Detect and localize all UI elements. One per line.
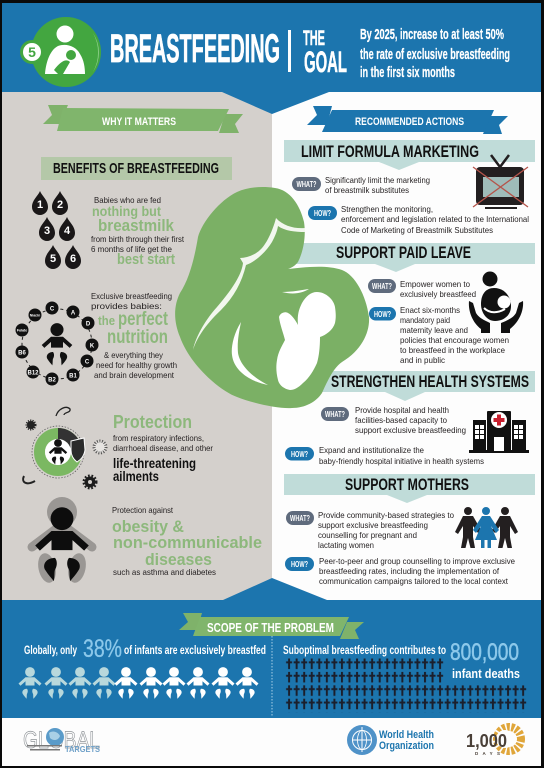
- logo: 1000 days: 1,000: [466, 731, 507, 751]
- logo: global targets 2025: TARGETS: [65, 744, 100, 754]
- benefit 4: text: obesity &: [112, 517, 184, 536]
- benefit 2: vitamins ring icon: Niacin: [30, 314, 40, 318]
- benefit 1: drops icon: 1: [37, 199, 43, 211]
- benefit 1: text: 6 months of life get the: [91, 244, 172, 254]
- benefit 1: drops icon: 4: [64, 225, 71, 237]
- text: strengthen health systems: facilities-based capacity to: [355, 415, 447, 425]
- benefit 2: vitamins ring icon: C: [85, 360, 90, 366]
- text: support mothers: support exclusive breastfeeding: [318, 520, 428, 530]
- benefit 4: text: diseases: [145, 550, 212, 569]
- pill: what, paid leave: WHAT?: [372, 282, 392, 291]
- pill: how, paid leave: [369, 307, 396, 320]
- benefit 2: vitamins ring icon: [16, 302, 98, 386]
- ribbon: scope of the problem: SCOPE OF THE PROBLEM: [207, 620, 334, 635]
- goal statement: in the first six months: [360, 65, 455, 81]
- benefit 3: protection shield icon: [23, 407, 106, 488]
- pictogram: infants row: [18, 667, 258, 699]
- panel: recommended actions background: [272, 90, 541, 602]
- ribbon: why it matters: [43, 105, 243, 133]
- text: support mothers: counselling for pregnant and: [318, 530, 417, 540]
- header banner: BREASTFEEDING: [110, 27, 280, 71]
- benefit 1: drops icon: [32, 191, 81, 269]
- statistic: 800,000 deaths: infant deaths: [452, 667, 520, 681]
- heading: benefits of breastfeeding: BENEFITS OF BREASTFEEDING: [53, 160, 219, 177]
- statistic: 38 percent: of infants are exclusively breastfed: [124, 645, 266, 657]
- benefit 1: drops icon: 3: [44, 225, 50, 237]
- benefit 4: baby with halo icon: [32, 497, 92, 584]
- pill: how, formula: HOW?: [314, 209, 331, 218]
- pill: how, paid leave: HOW?: [374, 310, 391, 319]
- benefit 2: vitamins ring icon: Folate: [17, 328, 27, 332]
- text: limit formula marketing: Significantly limit the marketing: [325, 175, 430, 185]
- benefit 2: vitamins ring icon: B6: [18, 350, 26, 356]
- benefit 2: text: need for healthy growth: [96, 360, 177, 370]
- benefit 1: drops icon: 2: [57, 199, 63, 211]
- subtitle: the goal: [303, 27, 347, 79]
- text: limit formula marketing: of breastmilk substitutes: [325, 185, 410, 195]
- pill: how, mothers: HOW?: [291, 560, 308, 569]
- benefit 1: drops icon: 5: [50, 253, 56, 265]
- pill: what, mothers: WHAT?: [290, 514, 310, 523]
- benefit 3: text: ailments: [113, 468, 159, 484]
- central illustration: mother and baby: [175, 187, 369, 408]
- header banner: [2, 3, 541, 114]
- benefit 2: vitamins ring icon: A: [71, 310, 76, 316]
- text: support paid leave: Empower women to: [400, 279, 470, 289]
- panel: footer background: [2, 716, 541, 766]
- text: support mothers: communication campaigns tailored to the local context: [319, 576, 509, 586]
- ribbon: scope of the problem: [179, 613, 364, 639]
- ribbon: recommended actions: [307, 106, 508, 134]
- benefit 2: text: perfect: [118, 309, 169, 330]
- text: support paid leave: [400, 279, 509, 365]
- panel: why it matters background: [2, 90, 272, 602]
- benefit 1: text: breastmilk: [98, 216, 174, 235]
- text: support paid leave: maternity leave and: [400, 325, 468, 335]
- pill: how, mothers: [285, 557, 314, 571]
- benefit 1: drops icon: 6: [70, 253, 76, 265]
- statistic: 38 percent: [24, 635, 266, 663]
- benefit 3: text: from respiratory infections,: [113, 433, 204, 443]
- benefit 4: text: such as asthma and diabetes: [113, 567, 217, 577]
- header banner: GOAL: [304, 46, 347, 79]
- pill: how, health systems: [285, 447, 314, 460]
- benefit 2: text: nutrition: [107, 327, 168, 348]
- benefit 2: text: Exclusive breastfeeding: [91, 291, 172, 301]
- text: support paid leave: exclusively breastfeed: [400, 289, 476, 299]
- statistic: 800,000 deaths: 800,000: [450, 639, 519, 666]
- heading text: support mothers: SUPPORT MOTHERS: [345, 476, 469, 494]
- statistic: 38 percent: Globally, only: [24, 645, 77, 657]
- logo: world health organization: World Health: [379, 729, 434, 741]
- benefit 2: text: the: [98, 313, 115, 328]
- band: strengthen health systems: [310, 371, 535, 401]
- text: support mothers: breastfeeding rates, including the implementation of: [319, 566, 500, 576]
- text: strengthen health systems: Provide hospital and health: [355, 405, 449, 415]
- icon: crossed-out television: [473, 155, 528, 209]
- text: support paid leave: mandatory paid: [400, 315, 450, 325]
- band: support paid leave: [284, 243, 535, 272]
- icon: breastfeeding target badge: [20, 17, 101, 87]
- band: support mothers: [284, 474, 535, 503]
- benefit 2: vitamins ring icon: B12: [27, 370, 39, 376]
- ribbon: recommended actions: RECOMMENDED ACTIONS: [355, 116, 464, 128]
- benefit 1: text: nothing but: [92, 203, 161, 219]
- text: support mothers: [318, 510, 515, 586]
- heading text: support paid leave: SUPPORT PAID LEAVE: [336, 244, 471, 262]
- divider bar: [288, 30, 291, 72]
- goal statement: [360, 27, 510, 81]
- benefit 3: text: Protection: [113, 411, 192, 432]
- pictogram: crosses: [285, 658, 527, 712]
- logo: world health organization: Organization: [379, 740, 434, 752]
- pill: what, formula: [292, 177, 321, 191]
- text: support mothers: lactating women: [318, 540, 374, 550]
- benefit 4: text: Protection against: [112, 505, 174, 515]
- heading: benefits of breastfeeding: [41, 157, 232, 180]
- scope of the problem banner: [2, 578, 541, 718]
- subtitle: the goal: THE: [303, 27, 325, 50]
- statistic: 800,000 deaths: [283, 639, 520, 681]
- logo: 1000 days: DAYS: [475, 751, 500, 756]
- text: strengthen health systems: support exclusive breastfeeding: [355, 425, 466, 435]
- benefit 3: text: life-threatening: [113, 455, 196, 471]
- benefit 4: text: non-communicable: [113, 533, 262, 552]
- benefit 1: text: from birth through their first: [91, 234, 185, 244]
- pill: what, paid leave: [368, 279, 396, 293]
- text: limit formula marketing: Strengthen the monitoring,: [341, 204, 433, 214]
- band: limit formula marketing: [284, 140, 535, 170]
- icon: mother and baby in hands: [469, 272, 523, 333]
- benefit 2: text: [91, 291, 177, 380]
- benefit 2: vitamins ring icon: K: [90, 344, 95, 350]
- benefit 3: text: diarrhoeal disease, and other: [113, 443, 213, 453]
- benefit 2: vitamins ring icon: D: [86, 322, 91, 328]
- benefit 2: vitamins ring icon: C: [50, 306, 55, 312]
- text: support mothers: Peer-to-peer and group counselling to improve exclusive: [319, 556, 515, 566]
- text: support mothers: Provide community-based strategies to: [318, 510, 454, 520]
- logo: world health organization: [347, 725, 434, 755]
- statistic: 38 percent: 38%: [83, 635, 122, 663]
- pill: how, formula: [308, 206, 337, 220]
- pill: what, mothers: [286, 511, 314, 525]
- pill: what, health systems: WHAT?: [325, 410, 345, 419]
- text: strengthen health systems: baby-friendly hospital initiative in health systems: [319, 456, 485, 466]
- benefit 2: text: provides babies:: [91, 301, 162, 311]
- text: support paid leave: and in public: [400, 355, 446, 365]
- benefit 1: text: [91, 195, 185, 268]
- text: limit formula marketing: Code of Marketing of Breastmilk Substitutes: [341, 225, 494, 235]
- benefit 4: text: [112, 505, 262, 577]
- logo: 1000 days: [466, 727, 521, 756]
- icon: hospital: [469, 411, 529, 453]
- text: strengthen health systems: Expand and institutionalize the: [319, 445, 424, 455]
- text: support paid leave: to breastfeed in the workplace: [400, 345, 505, 355]
- benefit 1: text: best start: [117, 252, 175, 268]
- benefit 2: vitamins ring icon: B1: [69, 374, 77, 380]
- text: strengthen health systems: [319, 405, 485, 466]
- logo: global targets 2025: GLOBAL: [23, 727, 100, 754]
- benefit 1: text: Babies who are fed: [94, 195, 161, 205]
- ribbon: why it matters: WHY IT MATTERS: [102, 116, 176, 128]
- text: support paid leave: policies that encourage women: [400, 335, 509, 345]
- heading text: limit formula marketing: LIMIT FORMULA MARKETING: [301, 143, 479, 161]
- text: limit formula marketing: [325, 175, 529, 235]
- benefit 2: text: and brain development: [94, 370, 175, 380]
- pill: what, health systems: [321, 407, 349, 421]
- benefit 2: vitamins ring icon: B2: [48, 378, 56, 384]
- text: support paid leave: Enact six-months: [400, 305, 461, 315]
- benefit 2: text: & everything they: [104, 350, 164, 360]
- pill: what, formula: WHAT?: [296, 180, 317, 189]
- benefit 3: text: [113, 411, 213, 484]
- statistic: 800,000 deaths: Suboptimal breastfeeding contributes to: [283, 645, 446, 657]
- pill: how, health systems: HOW?: [291, 450, 308, 459]
- icon: three people holding hands: [455, 507, 518, 548]
- icon: breastfeeding target badge: 5: [28, 44, 36, 60]
